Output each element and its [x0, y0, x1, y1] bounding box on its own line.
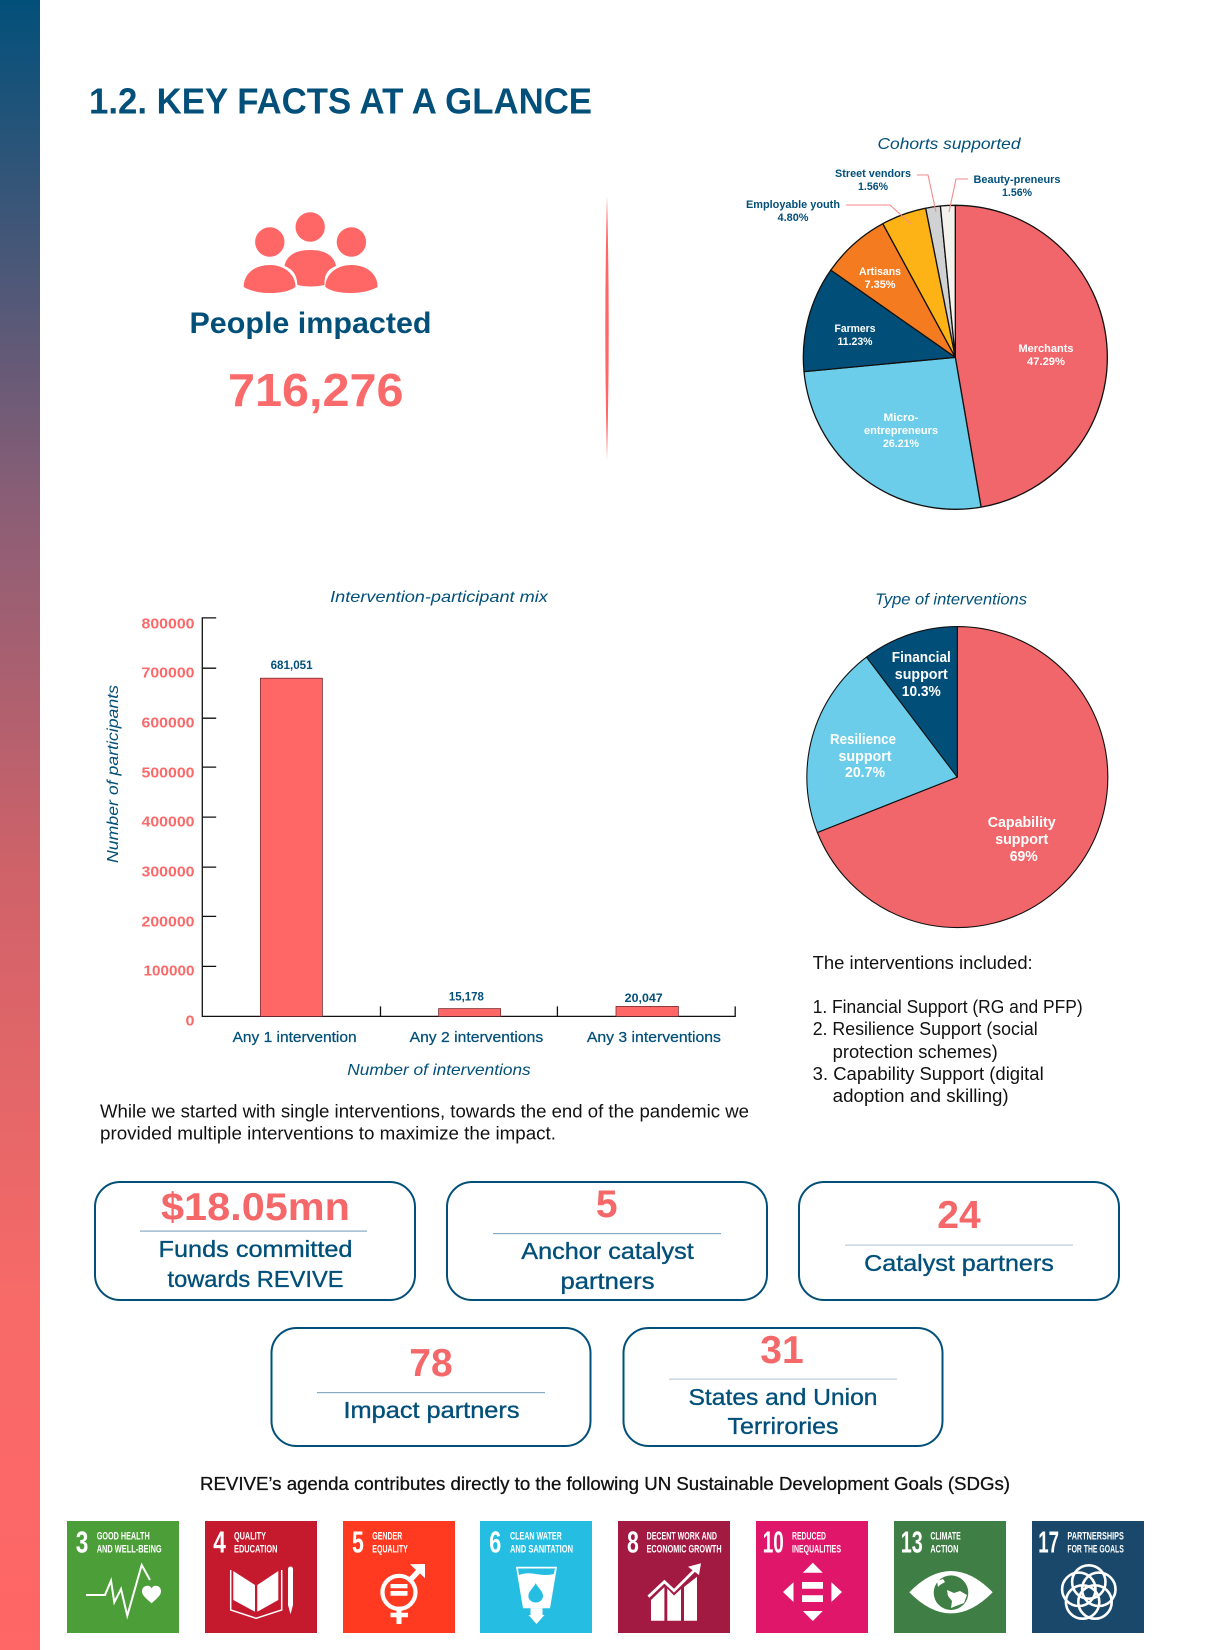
SDG 10 card: INEQUALITIES [792, 1544, 841, 1556]
SDG 3 card: 3 [76, 1524, 88, 1559]
slice labels: Artisans [859, 266, 901, 278]
SDG 4 card: 4 [213, 1524, 226, 1559]
text block: interventions list: 3. Capability Support (digital [813, 1064, 1044, 1084]
vertical divider [605, 196, 609, 460]
slice labels: Employable youth [746, 199, 840, 211]
sidebar gradient strip [0, 0, 40, 1650]
bar value labels [271, 660, 663, 1005]
x axis labels [233, 1029, 721, 1046]
SDG 8 card: ECONOMIC GROWTH [647, 1544, 722, 1556]
chart: type of interventions pie [807, 592, 1108, 928]
SDG 13 card: ACTION [930, 1544, 958, 1556]
SDG 5 card: 5 [352, 1524, 364, 1559]
chart: intervention-participant mix bar chart [105, 589, 735, 1079]
slice labels: Merchants [1018, 343, 1074, 355]
SDG 13 card: CLIMATE [930, 1530, 961, 1542]
text block: interventions list: adoption and skilling) [833, 1086, 1009, 1106]
SDG 17 card: 17 [1038, 1524, 1059, 1559]
slice labels: 1.56% [1002, 187, 1032, 199]
stat card: funds committed: Funds committed [158, 1236, 352, 1262]
stat card: states and union territories [624, 1328, 942, 1446]
stat card: anchor catalyst partners [447, 1182, 767, 1300]
SDG 13 card: 13 [901, 1524, 923, 1559]
SDG 6 card: AND SANITATION [510, 1544, 573, 1556]
SDG 3 card [67, 1521, 179, 1633]
label: people impacted: People impacted [190, 307, 432, 340]
bar value labels: 20,047 [625, 993, 663, 1005]
y axis labels: 400000 [142, 813, 194, 830]
stat card: funds committed: towards REVIVE [168, 1266, 344, 1292]
stat card: impact partners [272, 1328, 590, 1446]
pie slices [807, 627, 1108, 928]
SDG 8 card: 8 [627, 1524, 639, 1559]
y axis labels: 600000 [142, 714, 194, 732]
panel: people impacted [190, 212, 432, 416]
SDG 17 card [1032, 1521, 1144, 1633]
text block: multiple interventions note: provided multiple interventions to maximize the impact. [100, 1124, 556, 1144]
y axis title: Number of participants [105, 685, 122, 863]
number: 716,276: 716,276 [228, 364, 404, 416]
slice labels: entrepreneurs [864, 425, 938, 437]
stat card: anchor catalyst partners: 5 [596, 1183, 618, 1226]
slice labels: 69% [1010, 849, 1038, 865]
chart title: cohorts supported: Cohorts supported [878, 136, 1022, 153]
slice labels: support [995, 832, 1048, 848]
x axis labels: Any 3 interventions [587, 1029, 721, 1046]
stat card: states and union territories: Terrirories [728, 1413, 838, 1439]
SDG 3 card: AND WELL-BEING [97, 1544, 162, 1556]
slice labels: 26.21% [883, 438, 919, 450]
y axis labels: 300000 [142, 863, 194, 880]
slice labels: 1.56% [858, 181, 888, 193]
SDG 8 card [618, 1521, 730, 1633]
y axis labels: 200000 [142, 913, 194, 930]
SDG 10 card: REDUCED [792, 1530, 826, 1542]
stat card: impact partners: 78 [409, 1342, 453, 1385]
SDG 4 card [205, 1521, 317, 1633]
text block: multiple interventions note [100, 1102, 749, 1144]
stat card: anchor catalyst partners: partners [560, 1268, 654, 1294]
stat card: catalyst partners: 24 [937, 1194, 981, 1237]
stat card: funds committed: $18.05mn [161, 1186, 350, 1229]
text block: interventions list [813, 953, 1083, 1106]
y axis labels: 500000 [142, 764, 194, 782]
slice labels: Farmers [834, 323, 876, 335]
slice labels: 20.7% [845, 765, 885, 781]
slice labels: 10.3% [902, 684, 941, 700]
bar value labels: 681,051 [271, 660, 313, 672]
chart title: type of interventions: Type of interventions [875, 592, 1027, 609]
text block: interventions list: 1. Financial Support (RG and PFP) [813, 997, 1083, 1017]
y axis labels [142, 616, 194, 1030]
text block: multiple interventions note: While we started with single interventions, towards the end of the pandemic we [100, 1102, 749, 1122]
slice labels: 11.23% [838, 336, 873, 348]
stat card: impact partners: Impact partners [344, 1397, 520, 1423]
SDG 5 card [343, 1521, 455, 1633]
slice labels [746, 168, 1074, 450]
slice labels: support [838, 749, 892, 765]
SDG 5 card: GENDER [372, 1530, 403, 1542]
slice labels [830, 650, 1056, 865]
SDG 3 card: GOOD HEALTH [97, 1530, 150, 1542]
slice labels: Financial [892, 650, 951, 666]
SDG 5 card: EQUALITY [372, 1544, 408, 1556]
stat card: funds committed [95, 1182, 415, 1300]
pie slices [803, 205, 1107, 509]
chart: cohorts supported pie [746, 136, 1107, 509]
y axis labels: 100000 [144, 963, 194, 980]
slice labels: support [895, 667, 948, 683]
stat card: anchor catalyst partners: Anchor catalyst [521, 1238, 694, 1264]
y axis labels: 700000 [142, 664, 194, 682]
leader lines [846, 175, 968, 224]
text block: interventions list: The interventions included: [813, 953, 1033, 973]
chart title: intervention-participant mix: Intervention-participant mix [330, 589, 549, 606]
title: 1.2. KEY FACTS AT A GLANCE [89, 80, 592, 122]
stat card: states and union territories: 31 [760, 1329, 804, 1372]
slice labels: Capability [988, 815, 1056, 831]
text block: interventions list: 2. Resilience Support (social [813, 1019, 1038, 1039]
SDG 6 card: CLEAN WATER [510, 1530, 562, 1542]
x axis labels: Any 1 intervention [233, 1029, 357, 1046]
slice labels: Street vendors [835, 168, 911, 180]
stat card: states and union territories: States and Union [688, 1384, 878, 1410]
SDG 10 card [756, 1521, 868, 1633]
slice labels: Resilience [830, 732, 896, 748]
SDG 4 card: EDUCATION [234, 1544, 278, 1556]
SDG 4 card: QUALITY [234, 1530, 266, 1542]
slice labels: 47.29% [1027, 356, 1065, 368]
x axis title: Number of interventions [347, 1062, 531, 1079]
x axis labels: Any 2 interventions [410, 1029, 543, 1046]
SDG 6 card: 6 [489, 1524, 501, 1559]
SDG 8 card: DECENT WORK AND [647, 1530, 717, 1542]
stat card: catalyst partners: Catalyst partners [864, 1250, 1054, 1276]
SDG 17 card: FOR THE GOALS [1067, 1544, 1124, 1556]
text block: interventions list: protection schemes) [833, 1042, 998, 1062]
SDG 17 card: PARTNERSHIPS [1067, 1530, 1124, 1542]
SDG heading: REVIVE’s agenda contributes directly to the following UN Sustainable Development Goals (SDGs) [200, 1474, 1010, 1494]
bars [260, 678, 678, 1016]
stat card: catalyst partners [799, 1182, 1119, 1300]
slice labels: 4.80% [778, 212, 809, 224]
icon: people group [244, 212, 378, 293]
y axis labels: 0 [186, 1013, 194, 1030]
y axis labels: 800000 [142, 616, 194, 633]
slice labels: 7.35% [864, 279, 896, 291]
axes and ticks [202, 618, 735, 1016]
SDG 6 card [480, 1521, 592, 1633]
SDG 13 card [894, 1521, 1006, 1633]
slice labels: Micro- [884, 412, 919, 424]
slice labels: Beauty-preneurs [974, 174, 1060, 186]
bar value labels: 15,178 [449, 991, 484, 1003]
SDG 10 card: 10 [763, 1524, 784, 1559]
